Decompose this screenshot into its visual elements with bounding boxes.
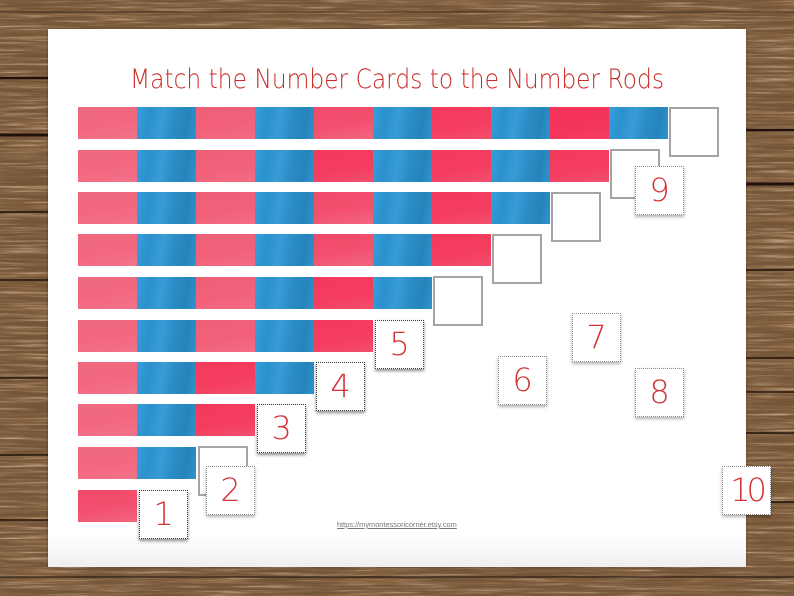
rod 7 xyxy=(78,234,491,266)
number card 6 xyxy=(498,356,547,405)
rod 2 xyxy=(78,447,196,479)
empty box for rod 2 xyxy=(198,446,248,496)
empty box for rod 6 xyxy=(433,276,483,326)
rod 4 xyxy=(78,362,314,394)
rod 5 xyxy=(78,320,373,352)
panel: worksheet paper xyxy=(48,29,746,567)
empty box for rod 7 xyxy=(492,234,542,284)
number card 10 xyxy=(722,466,771,515)
number card 2: 2 xyxy=(220,471,241,509)
number card 3: 3 xyxy=(271,409,292,447)
number card 6: 6 xyxy=(512,361,533,399)
number card 5 xyxy=(375,320,424,369)
number card 7 xyxy=(572,313,621,362)
number card 1: 1 xyxy=(153,495,174,533)
rod 6 xyxy=(78,277,432,309)
number card 8 xyxy=(635,368,684,417)
rod 9 xyxy=(78,150,609,182)
number card 8: 8 xyxy=(649,373,670,411)
empty box for rod 10 xyxy=(669,107,719,157)
website link: https://mymontessoricorner.etsy.com xyxy=(337,520,457,529)
number card 9 xyxy=(635,166,684,215)
empty box for rod 8 xyxy=(551,192,601,242)
number card 9: 9 xyxy=(649,171,670,209)
number card 10: 10 xyxy=(730,471,763,509)
rod 3 xyxy=(78,404,255,436)
rod 10 xyxy=(78,107,668,139)
number card 3 xyxy=(257,404,306,453)
rod 1 xyxy=(78,490,137,522)
number card 1 xyxy=(139,490,188,539)
number card 5: 5 xyxy=(389,325,410,363)
number card 7: 7 xyxy=(586,318,607,356)
number card 4: 4 xyxy=(330,367,351,405)
number card 2 xyxy=(206,466,255,515)
empty box for rod 9 xyxy=(610,149,660,199)
rod 8 xyxy=(78,192,550,224)
number card 4 xyxy=(316,362,365,411)
